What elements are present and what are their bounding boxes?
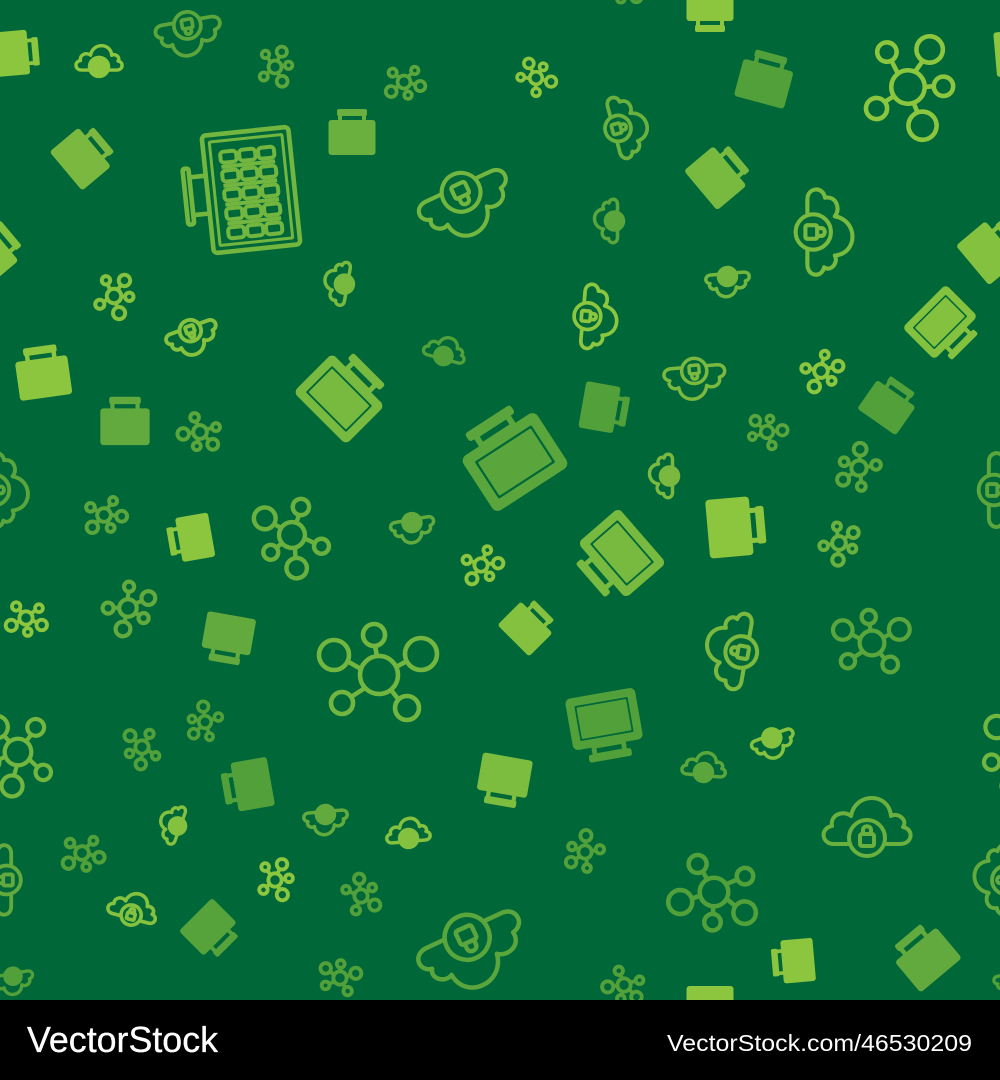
icon: small cloud	[321, 259, 357, 307]
icon: suitcase	[179, 898, 245, 964]
icon: suitcase	[770, 938, 816, 984]
icon: suitcase	[475, 752, 533, 810]
icon: cloud lock	[153, 6, 225, 61]
icon: cloud lock	[700, 608, 764, 692]
icon: suitcase	[734, 47, 797, 109]
icon: suitcase	[0, 29, 41, 77]
icon: suitcase	[0, 213, 28, 285]
icon: suitcase	[49, 120, 120, 191]
icon: cloud lock	[105, 887, 160, 931]
icon: cloud lock	[410, 155, 522, 251]
icon: suitcase	[993, 29, 1000, 77]
icon: small network	[174, 410, 226, 457]
footer bar	[0, 1000, 1000, 1080]
icon: small cloud	[681, 751, 727, 783]
icon: cloud lock	[408, 894, 537, 1006]
brand wordmark: VectorStock	[27, 1019, 219, 1060]
icon: suitcase	[219, 757, 275, 814]
icon: small cloud	[389, 510, 437, 546]
icon: network	[242, 485, 340, 588]
icon: small network	[599, 0, 649, 9]
icon: small network	[79, 492, 131, 539]
image reference URL: VectorStock.com/46530209	[667, 1030, 972, 1056]
icon: cloud lock	[796, 189, 852, 275]
icon: small cloud	[303, 804, 349, 836]
icon: suitcase	[100, 397, 150, 445]
icon: monitor	[902, 284, 987, 369]
icon: small cloud	[992, 965, 1000, 997]
icon: small cloud	[385, 817, 431, 849]
icon: keypad monitor	[179, 127, 300, 256]
icon: suitcase	[956, 213, 1000, 285]
icon: small network	[260, 47, 292, 87]
icon: small network	[259, 859, 293, 900]
icon: small cloud	[154, 801, 192, 847]
icon: small network	[118, 723, 164, 773]
icon: small network	[337, 869, 387, 921]
icon: cloud lock	[162, 312, 223, 362]
icon: small network	[95, 574, 164, 644]
icon: cloud lock	[979, 453, 1000, 527]
icon: monitor	[565, 687, 646, 765]
icon: large network	[319, 624, 437, 720]
icon: small cloud	[705, 266, 751, 298]
icon: suitcase	[887, 917, 962, 993]
icon: suitcase	[13, 343, 72, 401]
icon: small network	[59, 833, 106, 875]
icon: small cloud	[76, 46, 122, 76]
icon: cloud lock	[663, 356, 727, 401]
icon: suitcase	[857, 371, 922, 436]
icon: small network	[382, 63, 427, 103]
icon: network	[974, 705, 1000, 801]
icon: suitcase	[497, 594, 560, 657]
icon: small cloud	[748, 722, 799, 764]
icon: cloud lock	[597, 91, 654, 162]
icon: cloud lock	[0, 845, 21, 915]
icon: small network	[743, 409, 791, 453]
icon: small cloud	[421, 332, 469, 370]
icon: small cloud	[650, 454, 678, 498]
icon: suitcase	[686, 986, 734, 1032]
icon: small cloud	[594, 199, 624, 243]
icon: cloud lock	[571, 283, 620, 351]
icon: cloud lock	[0, 453, 28, 527]
icon: network	[0, 705, 59, 801]
icon: cloud lock	[974, 845, 1000, 915]
icon: suitcase	[328, 109, 376, 155]
icon: small network	[456, 541, 508, 591]
icon: keyboard case	[450, 395, 570, 513]
icon: suitcase	[705, 495, 767, 559]
icon: network	[833, 610, 910, 672]
icon: network	[665, 851, 764, 937]
icon: small cloud	[0, 965, 35, 997]
icon: suitcase	[684, 138, 756, 210]
icon: small network	[815, 516, 866, 570]
icon: suitcase	[578, 381, 632, 435]
icon: small network	[559, 825, 609, 878]
icon: small network	[6, 602, 47, 636]
icon: small network	[829, 438, 886, 498]
icon: suitcase	[686, 0, 734, 32]
icon: cloud lock	[824, 798, 911, 856]
icon: small network	[511, 52, 561, 102]
icon: small network	[93, 271, 137, 321]
icon: small network	[599, 963, 649, 1009]
icon: small network	[795, 345, 849, 398]
icon: monitor	[293, 342, 396, 445]
icon: suitcase	[165, 512, 215, 564]
icon: large network	[863, 30, 958, 142]
icon: small network	[182, 698, 226, 746]
icon: suitcase	[199, 611, 256, 667]
icon: small network	[317, 957, 363, 997]
icon: monitor	[566, 508, 666, 608]
